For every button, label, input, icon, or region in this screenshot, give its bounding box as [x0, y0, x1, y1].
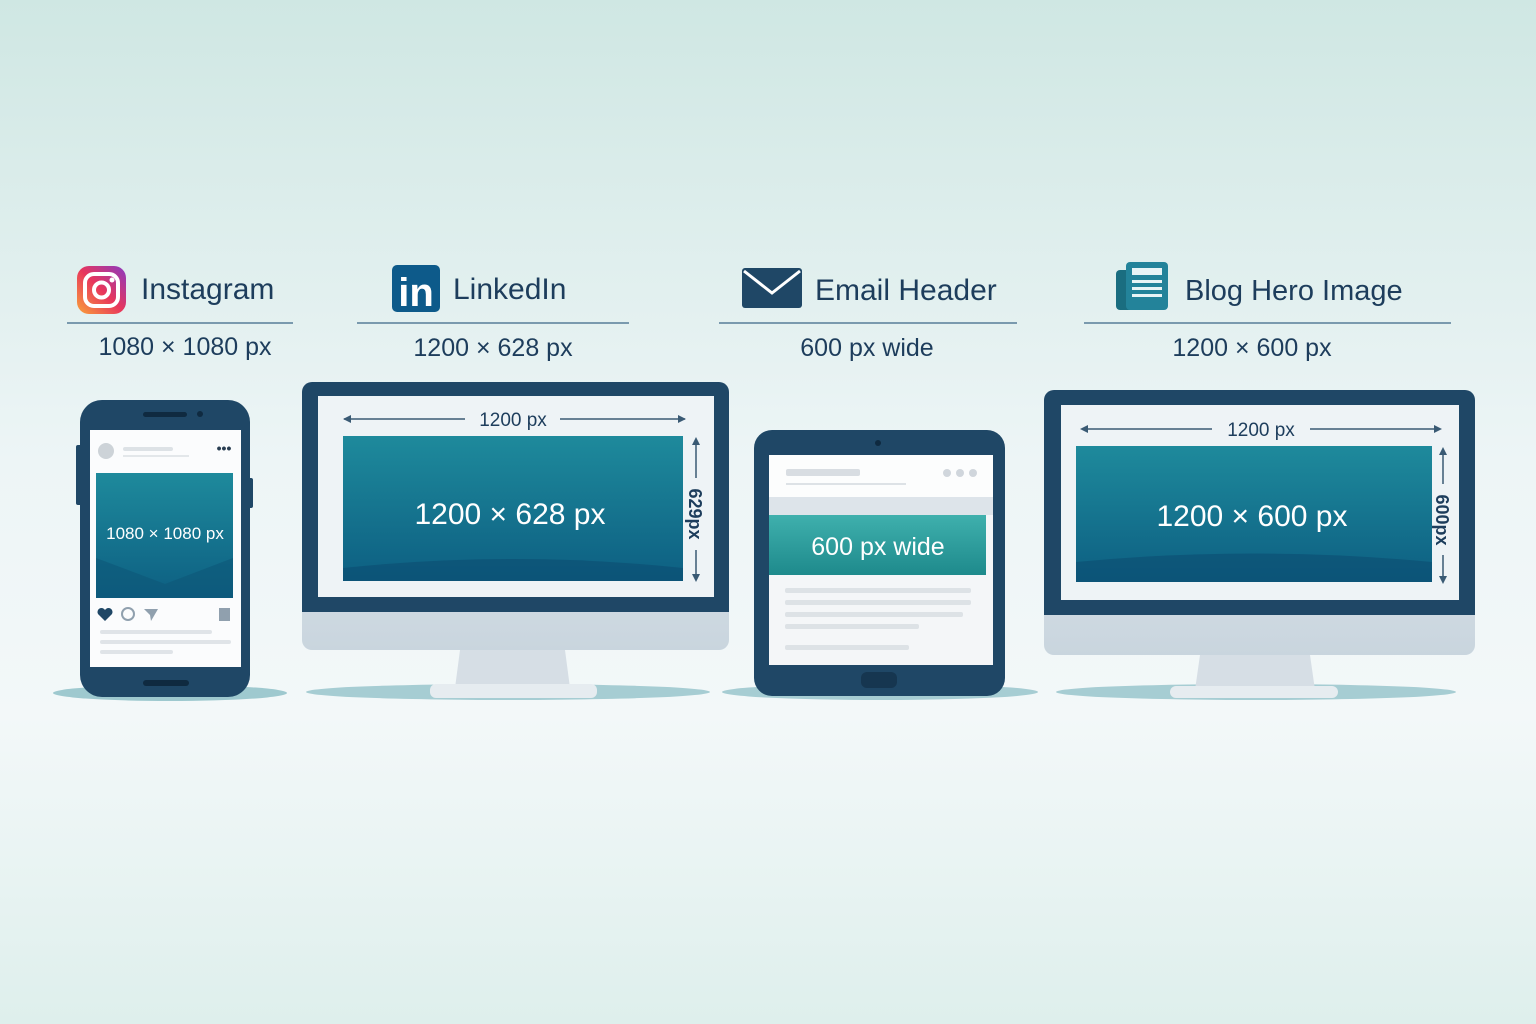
device: monitor [1044, 390, 1475, 700]
device: tablet [722, 430, 1038, 700]
image: 1200x600 [1076, 446, 1432, 582]
device: monitor [302, 382, 729, 700]
heading: linkedin: LinkedIn [453, 273, 566, 306]
dimension: height: 600px [1432, 494, 1452, 546]
dimension: width [1080, 420, 1442, 441]
banner: 600 px wide [769, 515, 986, 575]
size label: 1080 × 1080 px [98, 333, 272, 361]
panel: instagram [53, 266, 293, 701]
device: phone [53, 400, 287, 701]
size label: 600 px wide [800, 334, 934, 362]
dimension: height: 629px [685, 488, 705, 540]
icon: instagram [77, 266, 126, 314]
image: 1080x1080: 1080 × 1080 px [106, 524, 224, 543]
image: 1080x1080 [96, 473, 233, 598]
icon: envelope [742, 268, 802, 308]
dimension: width [343, 410, 686, 431]
icon: linkedin [392, 265, 440, 315]
size label: 1200 × 628 px [413, 334, 573, 362]
icon: document [1116, 262, 1168, 310]
banner: 600 px wide: 600 px wide [811, 533, 945, 561]
image: 1200x628: 1200 × 628 px [414, 498, 606, 531]
dimension: width: 1200 px [1227, 420, 1295, 441]
dimension: height [685, 437, 705, 582]
image: 1200x600: 1200 × 600 px [1156, 500, 1348, 533]
image: 1200x628 [343, 436, 683, 581]
device: phone: ••• [217, 440, 231, 456]
panel: blog hero image [1044, 262, 1475, 700]
dimension: height [1432, 447, 1452, 584]
heading: instagram: Instagram [141, 273, 274, 306]
size label: 1200 × 600 px [1172, 334, 1332, 362]
heading: blog hero image: Blog Hero Image [1185, 275, 1403, 307]
panel: linkedin [302, 265, 729, 700]
panel: email header [719, 268, 1038, 700]
dimension: width: 1200 px [479, 410, 547, 431]
heading: email header: Email Header [815, 274, 997, 307]
icon: linkedin: in [398, 271, 434, 315]
